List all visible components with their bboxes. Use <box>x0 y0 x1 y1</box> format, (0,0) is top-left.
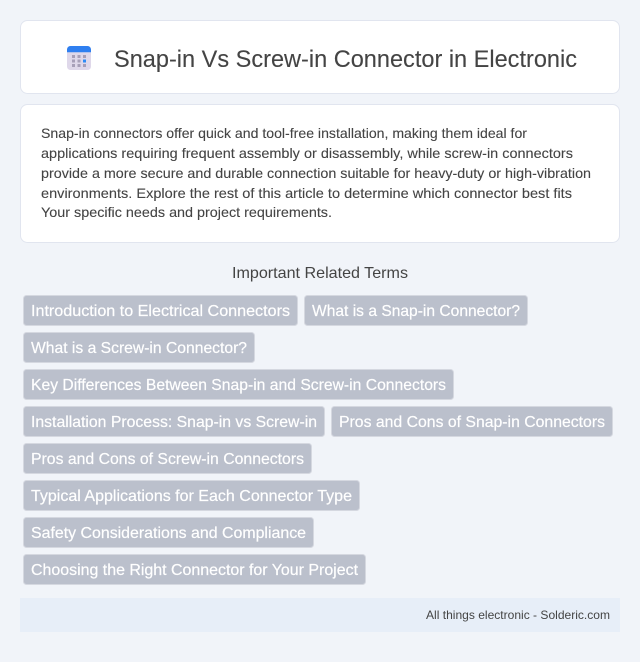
title: Snap-in Vs Screw-in Connector in Electronic <box>114 46 577 73</box>
tag: Pros and Cons of Screw-in Connectors <box>24 444 312 474</box>
tag: Pros and Cons of Screw-in Connectors: Pros and Cons of Screw-in Connectors <box>31 451 304 468</box>
tag: Safety Considerations <box>24 518 314 548</box>
tag: Typical Applications <box>24 480 360 510</box>
tag: What is a Snap-in Connector?: What is a Snap-in Connector? <box>312 303 520 320</box>
tag: Installation Process: Installation Process: Snap-in vs Screw-in <box>31 414 317 431</box>
tag: Choosing the Right Connector <box>24 554 366 584</box>
tag: Safety Considerations: Safety Considerations and Compliance <box>31 525 306 542</box>
tag: Introduction to Electrical Connectors <box>24 296 298 326</box>
tag: What is a Screw-in Connector? <box>24 332 254 362</box>
tag: Installation Process <box>24 406 324 436</box>
text block: summary: Your specific needs and project requirements. <box>41 204 332 220</box>
panel: title card <box>20 20 620 94</box>
tag: Introduction to Electrical Connectors: Introduction to Electrical Connectors <box>31 303 290 320</box>
tag: Key Differences <box>24 370 454 400</box>
tag: Key Differences: Key Differences Between Snap-in and Screw-in Connectors <box>31 377 446 394</box>
text block: summary: Snap-in connectors offer quick and tool-free installation, making them ideal for <box>41 125 527 141</box>
tag: Pros and Cons of Snap-in Connectors: Pros and Cons of Snap-in Connectors <box>339 414 605 431</box>
text block: summary: environments. Explore the rest of this article to determine which connector best fits <box>41 185 572 201</box>
tag: What is a Screw-in Connector?: What is a Screw-in Connector? <box>31 340 247 357</box>
tag: Pros and Cons of Snap-in Connectors <box>332 406 612 436</box>
text block: summary: applications requiring frequent assembly or disassembly, while screw-in connectors <box>41 145 573 161</box>
panel: summary paragraph <box>20 104 620 242</box>
tag: What is a Snap-in Connector? <box>304 296 528 326</box>
footer text: All things electronic - Solderic.com <box>426 608 610 622</box>
tag: Choosing the Right Connector: Choosing the Right Connector for Your Project <box>31 562 359 579</box>
tag: Typical Applications: Typical Applications for Each Connector Type <box>31 488 352 505</box>
icon: calendar <box>67 46 91 70</box>
text block: summary <box>41 125 591 220</box>
text block: summary: provide a more secure and durable connection suitable for heavy-duty or high-vibration <box>41 165 591 181</box>
heading: related terms: Important Related Terms <box>232 265 408 282</box>
footer bar <box>20 598 620 632</box>
